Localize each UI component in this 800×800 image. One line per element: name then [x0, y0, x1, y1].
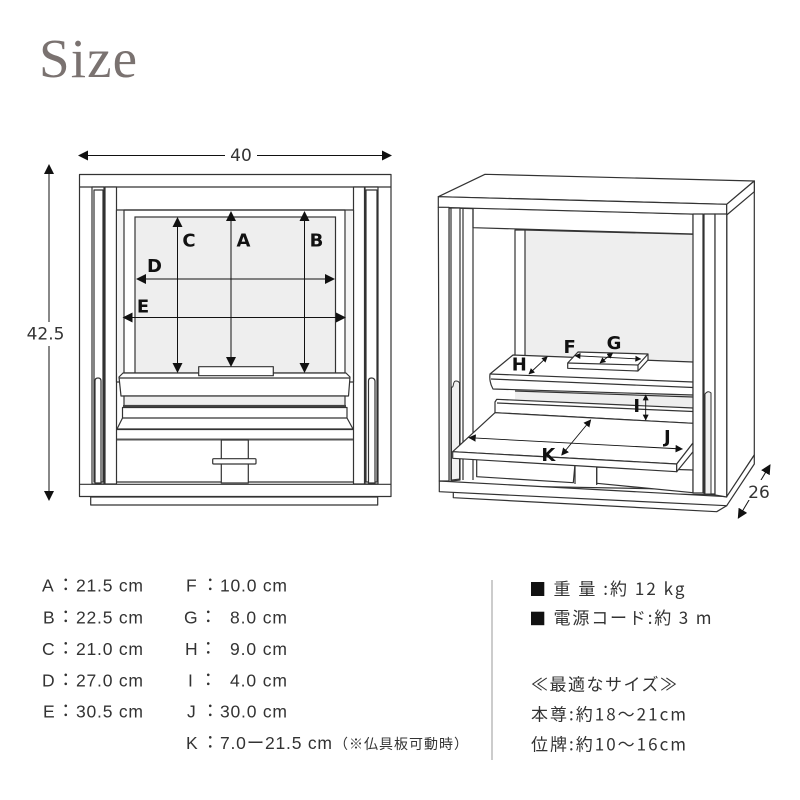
vertical divider: [491, 580, 493, 760]
row C: ：: [57, 638, 74, 658]
arrow J: [469, 438, 682, 449]
row B: 22.5 cm: [76, 608, 143, 628]
label C: C: [182, 230, 196, 252]
row K: 7.0ー21.5 cm: [220, 733, 332, 753]
row F: ：: [202, 575, 219, 595]
lower step: [495, 399, 693, 423]
label A: A: [237, 230, 251, 252]
offering block: [568, 352, 648, 371]
row H: [185, 638, 287, 659]
front view interior dimension arrows: [124, 212, 345, 372]
row F: 10.0 cm: [220, 576, 287, 596]
row J: J: [187, 702, 196, 722]
arrow K: [562, 420, 591, 455]
row G: G: [184, 608, 198, 628]
back panel: [135, 217, 336, 373]
row A: ：: [57, 575, 74, 595]
perspective view cabinet drawing: [438, 174, 754, 512]
row C: [42, 638, 143, 659]
label D: D: [147, 256, 162, 277]
row K: （※仏具板可動時）: [334, 736, 468, 752]
arrow G: [600, 353, 613, 363]
row G: [184, 607, 287, 628]
inner alcove side walls: [116, 210, 354, 382]
row E: E: [43, 702, 55, 722]
row D: D: [42, 671, 55, 691]
label J: J: [662, 427, 671, 448]
arrow H: [529, 357, 547, 374]
row J: ：: [202, 701, 219, 721]
row I: ：: [200, 670, 217, 690]
perspective view dimension arrows: [469, 333, 682, 466]
row F: [186, 575, 287, 596]
notes heading: ≪最適なサイズ≫: [531, 670, 677, 696]
lower altar steps: [117, 396, 353, 440]
weight and power cord specs: [531, 575, 712, 629]
header rail: [473, 208, 693, 234]
label G: G: [607, 333, 621, 354]
label B: B: [310, 230, 323, 252]
inner post: [515, 230, 525, 356]
optimal size notes: [531, 670, 686, 756]
base and plinth: [439, 455, 754, 512]
row K: K: [186, 733, 198, 753]
power cord: 電源コード:約 3 m: [554, 604, 712, 629]
row B: [43, 607, 143, 628]
arrow E: [124, 316, 345, 318]
row G: 8.0 cm: [230, 608, 287, 628]
row G: ：: [200, 607, 217, 627]
row B: B: [43, 608, 55, 628]
row H: 9.0 cm: [230, 639, 287, 659]
shelf with block: [119, 367, 350, 396]
top board: [438, 174, 754, 215]
row H: ：: [200, 638, 217, 658]
row D: [42, 670, 143, 691]
row I: I: [188, 671, 193, 691]
right door pillars: [354, 187, 378, 484]
main statue size: 本尊:約18～21cm: [531, 700, 686, 726]
row I: [188, 670, 287, 691]
label K: K: [541, 445, 556, 466]
row E: 30.5 cm: [76, 702, 143, 722]
label E: E: [137, 296, 149, 318]
weight: 重 量 :約 12 kg: [554, 575, 685, 600]
cabinet side: [727, 181, 754, 497]
arrow C: [176, 218, 178, 372]
memorial tablet size: 位牌:約10～16cm: [531, 730, 686, 756]
lower back area: [515, 391, 693, 412]
arrow B: [304, 212, 306, 372]
row K: ：: [202, 732, 219, 752]
plinth: [91, 497, 378, 505]
row H: H: [185, 639, 198, 659]
row K: [186, 732, 468, 753]
row I: 4.0 cm: [230, 671, 287, 691]
width dimension 40: 40: [230, 146, 252, 166]
row C: C: [42, 639, 55, 659]
lower drawers: [477, 458, 693, 493]
title: Size: [39, 28, 137, 89]
dimension list column 2: [184, 575, 468, 753]
row E: [43, 701, 143, 722]
arrow F: [575, 356, 641, 359]
row F: F: [186, 576, 197, 596]
label H: H: [512, 354, 527, 376]
row A: [42, 575, 143, 596]
height dimension 42.5: 42.5: [27, 324, 64, 344]
height dimension 42.5: [24, 165, 68, 500]
row A: 21.5 cm: [76, 576, 143, 596]
left door pillars: [438, 207, 473, 481]
pull-out board: [453, 413, 693, 472]
row J: [187, 701, 287, 722]
row A: A: [42, 576, 54, 596]
label I: I: [633, 396, 640, 417]
row B: ：: [57, 607, 74, 627]
dimension list column 1: [42, 575, 143, 722]
drawer with center post and handle: [116, 440, 354, 483]
row C: 21.0 cm: [76, 639, 143, 659]
row D: ：: [57, 670, 74, 690]
left door pillars: [92, 187, 116, 484]
row E: ：: [57, 701, 74, 721]
back panel: [525, 230, 693, 400]
arrow A: [230, 212, 232, 366]
depth dimension 26: [738, 465, 772, 518]
row D: 27.0 cm: [76, 671, 143, 691]
front view cabinet drawing: [80, 174, 391, 505]
cabinet interior back: [449, 208, 727, 490]
depth dimension 26: 26: [748, 483, 770, 503]
upper shelf: [490, 355, 693, 395]
row J: 30.0 cm: [220, 702, 287, 722]
arrow I: [645, 395, 647, 420]
label F: F: [564, 337, 576, 358]
right door pillars: [693, 214, 727, 497]
arrow D: [137, 278, 334, 280]
